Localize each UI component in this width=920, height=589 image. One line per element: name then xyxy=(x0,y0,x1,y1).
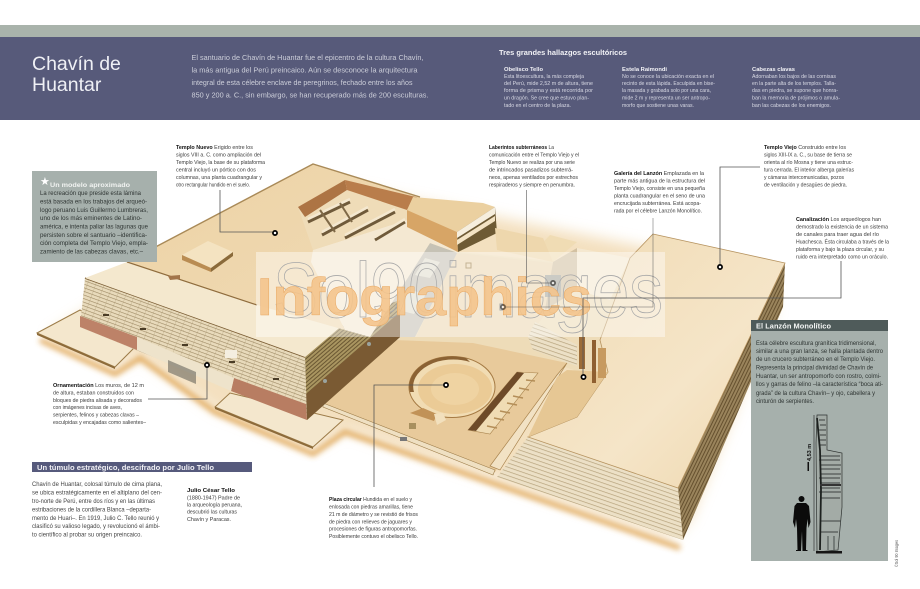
callout: Templo Nuevo: Templo Viejo, la base de su plataforma xyxy=(176,160,265,166)
Lanzón paragraph: grada” de la cultura Chavín– y ojo, cabellera y xyxy=(756,390,876,397)
callout: Templo Nuevo: Templo Nuevo Erigido entre los xyxy=(176,145,253,151)
finding: Estela Raimondi xyxy=(622,67,715,109)
Lanzón paragraph xyxy=(756,340,883,405)
ground wash xyxy=(40,180,775,548)
panel: Un modelo aproximado: ción completa del Templo Viejo, empla- xyxy=(40,241,148,247)
callout: Plaza circular: Plaza circular Hundida en el suelo y xyxy=(329,497,412,503)
finding: Estela Raimondi: No se conoce la ubicación exacta en el xyxy=(622,74,714,80)
callout: Plaza circular: enlosada con piedras amarillas, tiene xyxy=(329,504,413,510)
callout: Canalización: plataforma y bajo la plaza circular, y su xyxy=(796,247,884,253)
watermark: Sol90images: Sol90images xyxy=(273,246,663,334)
panel: Un modelo aproximado: américa, e intenta paliar las lagunas que xyxy=(40,224,149,230)
callout: Canalización: ruido era interpretado como un oráculo. xyxy=(796,254,888,260)
callout: Templo Nuevo: siglos VIII a. C. como ampliación del xyxy=(176,152,261,158)
strip between temples xyxy=(495,228,553,262)
callout: Plaza circular: Posiblemente contuvo el obelisco Tello. xyxy=(329,534,418,540)
callout: Ornamentación: esculpidas y encajadas como salientes– xyxy=(53,420,146,426)
drawing: Lanzón monolith xyxy=(816,415,842,554)
túmulo paragraph: clasificó su valioso legado, y revolucionó el ámbi- xyxy=(32,523,160,530)
bio: Julio César Tello: la arqueología peruana, xyxy=(187,502,242,508)
icon: human silhouette for scale xyxy=(793,496,810,551)
bio: Julio César Tello: (1880-1947) Padre de xyxy=(187,496,240,502)
bio: Julio César Tello xyxy=(187,488,242,523)
túmulo paragraph: Chavín de Huantar, colosal túmulo de cima plana, xyxy=(32,481,162,488)
front lower slab xyxy=(215,393,343,449)
Lanzón paragraph: similar a una gran lanza, se halla plantada dentro xyxy=(756,348,883,355)
túmulo paragraph: estribaciones de la cordillera Blanca –departa- xyxy=(32,506,151,514)
scale line and height label xyxy=(807,415,814,551)
callout: Galería del Lanzón: encrucijada subterránea. Está acopa- xyxy=(614,201,701,207)
callout: Templo Viejo: de ventilación y desagües de piedra. xyxy=(764,182,847,188)
finding: Cabezas clavas: en la parte alta de los templos. Talla- xyxy=(752,81,836,87)
Templo Nuevo front wall xyxy=(80,278,307,420)
callout: Ornamentación: de altura, estaban construidos con xyxy=(53,390,134,396)
intro paragraph: integral de esta célebre enclave de peregrinos, fechado entre los años xyxy=(192,78,413,87)
callout: Laberintos subterráneos: Laberintos subterráneos La xyxy=(489,145,554,151)
callout: Galería del Lanzón: Galería del Lanzón Emplazada en la xyxy=(614,171,704,177)
callout: Plaza circular: de piedra con relieves de jaguares y xyxy=(329,520,412,526)
callout: Galería del Lanzón: Templo Viejo, consiste en una pequeña xyxy=(614,186,705,192)
callout: Templo Viejo: siglos XIII-IX a. C., su base de tierra se xyxy=(764,152,852,158)
tall stone block xyxy=(407,197,497,252)
central corridors xyxy=(370,234,653,380)
left lower slab xyxy=(37,310,137,369)
callout: Templo Viejo: Templo Viejo Construido entre los xyxy=(764,145,846,151)
bio: Julio César Tello: Julio César Tello xyxy=(187,488,236,494)
callout: Laberintos subterráneos xyxy=(489,145,579,285)
intro paragraph xyxy=(192,53,428,100)
Lanzón paragraph: Representa la principal divinidad de Chavín de xyxy=(756,364,873,372)
platform top of Templo Nuevo xyxy=(127,164,458,337)
callout: Galería del Lanzón: rada por el célebre Lanzón Monolítico. xyxy=(614,208,702,214)
callout: Templo Nuevo: columnas, una planta cuadrangular y xyxy=(176,175,262,181)
callout: Ornamentación xyxy=(53,363,209,426)
callout: Laberintos subterráneos: respiraderos y siempre en penumbra. xyxy=(489,182,575,188)
Lanzón paragraph: de un crucero subterráneo en el Templo Viejo. xyxy=(756,356,875,363)
callout: Ornamentación: serpientes, felinos y cabezas clavas – xyxy=(53,412,139,418)
Lanzón paragraph: Huantar, un ser antropomorfo con rostro, colmi- xyxy=(756,373,881,380)
túmulo paragraph: to científico al probar su origen preincaico. xyxy=(32,532,142,538)
callout: Ornamentación: con imágenes incisas de aves, xyxy=(53,405,122,411)
callout: Templo Nuevo: otro rectangular hundido en el suelo. xyxy=(176,182,250,188)
circular plaza floor xyxy=(323,340,567,475)
callout: Laberintos subterráneos: de intrincados pasadizos subterrá- xyxy=(489,168,573,174)
finding: Cabezas clavas: ban las cabezas de los enemigos. xyxy=(752,103,831,109)
callout: Templo Viejo xyxy=(718,145,854,269)
bio: Julio César Tello: Chavín y Paracas. xyxy=(187,517,231,523)
panel: Un modelo aproximado xyxy=(32,171,157,262)
finding: Obelisco Tello: Esta litoescultura, la más compleja xyxy=(504,74,584,80)
callout: Laberintos subterráneos: neos, apenas ventilados por estrechos xyxy=(489,175,578,181)
callout: Canalización: de canales para traer agua del río xyxy=(796,232,879,238)
finding: Cabezas clavas: das en piedra, se supone que honra- xyxy=(752,88,838,94)
callout: Plaza circular xyxy=(329,383,448,540)
sunken circular plaza xyxy=(409,356,495,425)
intro paragraph: El santuario de Chavín de Huantar fue el epicentro de la cultura Chavín, xyxy=(192,53,424,62)
finding: Cabezas clavas: ban la memoria de prójimos o amula- xyxy=(752,95,840,101)
finding: Obelisco Tello: un dragón. Se cree que estuvo plan- xyxy=(504,95,589,101)
Lanzón paragraph: Esta célebre escultura granítica tridimensional, xyxy=(756,340,876,347)
callout: Laberintos subterráneos: comunicación entre el Templo Viejo y el xyxy=(489,152,579,158)
red base bands xyxy=(80,316,137,350)
finding: Estela Raimondi: la masada y grabada solo por una cara, xyxy=(622,88,711,94)
title: Huantar xyxy=(32,74,102,96)
túmulo paragraph: se ubica estratégicamente en el altiplano del cen- xyxy=(32,490,162,496)
callout: Galería del Lanzón: parte más antigua de la estructura del xyxy=(614,178,705,184)
exposed gallery xyxy=(528,370,608,437)
watermark: Infographics: Infographics xyxy=(257,268,592,327)
panel: Un túmulo estratégico xyxy=(32,462,252,538)
icon: star: ★ xyxy=(40,176,50,188)
finding: Estela Raimondi: morfo que sostiene unas varas. xyxy=(622,103,694,109)
callout: Canalización: Canalización Los arqueólogos han xyxy=(796,217,881,223)
panel: Un modelo aproximado: Un modelo aproximado xyxy=(50,182,130,189)
sunken rectangular court xyxy=(298,180,420,250)
callout: Templo Viejo: orienta al río Mosna y tiene una estruc- xyxy=(764,160,853,166)
top surface xyxy=(528,234,785,488)
callout: Templo Viejo: y cámaras intercomunicadas, pozos xyxy=(764,175,844,181)
terrace top xyxy=(85,262,352,357)
stepped channel xyxy=(468,372,538,434)
panel: Un modelo aproximado: logo peruano Luis Guillermo Lumbreras, xyxy=(40,208,148,214)
callout: Templo Nuevo xyxy=(176,145,277,235)
findings heading: Tres grandes hallazgos escultóricos xyxy=(499,48,627,57)
túmulo paragraph: tro-norte de Perú, entre dos ríos y en las últimas xyxy=(32,498,155,505)
small stone base xyxy=(182,241,233,272)
right side wall xyxy=(678,263,785,540)
finding: Obelisco Tello xyxy=(504,67,593,109)
light floor beneath pit xyxy=(311,216,458,337)
panel: Un modelo aproximado: persisten sobre el santuario –identifica- xyxy=(40,233,147,239)
scale line and height label: 4,53 m xyxy=(807,444,813,461)
panel: Un modelo aproximado: La recreación que preside esta lámina xyxy=(40,191,142,197)
finding: Obelisco Tello: del Perú, mide 2,52 m de altura, tiene xyxy=(504,81,593,87)
callout: Plaza circular: 21 m de diámetro y se revistió de frisos xyxy=(329,512,418,518)
panel: El Lanzón Monolítico xyxy=(751,320,888,561)
intro paragraph: 850 y 200 a. C., sin embargo, se han recuperado más de 200 esculturas. xyxy=(192,90,428,100)
intro paragraph: la más antigua del Perú preincaico. Aún se desconoce la arquitectura xyxy=(192,66,418,74)
panel: El Lanzón Monolítico: El Lanzón Monolítico xyxy=(756,322,831,330)
callout: Templo Nuevo: central incluyó un pórtico con dos xyxy=(176,168,256,174)
callout: Canalización xyxy=(581,217,889,379)
finding: Obelisco Tello: Obelisco Tello xyxy=(504,67,544,73)
front wall xyxy=(497,437,683,540)
callout: Canalización: Huachesca. Ésta circulaba a través de la xyxy=(796,238,889,246)
finding: Cabezas clavas: Adornaban los bajos de las cornisas xyxy=(752,74,836,80)
illustration: Chavín de Huantar temple complex xyxy=(37,164,785,548)
finding: Estela Raimondi: mide 2 m y representa un ser antropo- xyxy=(622,95,710,101)
callout: Laberintos subterráneos: Templo Nuevo se realiza por una serie xyxy=(489,160,575,166)
finding: Estela Raimondi: recinto de esta lápida. Esculpida en bise- xyxy=(622,81,715,87)
túmulo paragraph xyxy=(32,481,162,538)
finding: Cabezas clavas: Cabezas clavas xyxy=(752,67,795,73)
bio: Julio César Tello: descubrió las culturas xyxy=(187,510,237,516)
finding: Obelisco Tello: tado en el centro de la plaza. xyxy=(504,103,571,109)
finding: Estela Raimondi: Estela Raimondi xyxy=(622,67,668,73)
callout: Galería del Lanzón xyxy=(501,171,705,309)
Templo Viejo xyxy=(497,234,785,540)
Lanzón paragraph: cinturón de serpientes. xyxy=(756,398,814,405)
túmulo paragraph: mento de Huari–. En 1919, Julio C. Tello reunió y xyxy=(32,515,160,522)
panel: Un modelo aproximado: está basada en los trabajos del arqueó- xyxy=(40,200,147,206)
panel: Un modelo aproximado: uno de los más eminentes de Latino- xyxy=(40,216,142,222)
header band xyxy=(0,25,920,120)
Lanzón paragraph: llos y garras de felino –la característica “boca ati- xyxy=(756,381,883,388)
callout: Templo Viejo: tura cerrada. El interior alberga galerías xyxy=(764,168,854,174)
panel: Un túmulo estratégico: Un túmulo estratégico, descifrado por Julio Tello xyxy=(37,463,214,472)
callout: Galería del Lanzón: planta cuadrangular en el seno de una xyxy=(614,194,705,200)
title: Chavín de xyxy=(32,53,121,75)
finding: Obelisco Tello: forma de prisma y está recorrida por xyxy=(504,88,593,94)
right face of Templo Nuevo xyxy=(305,300,400,420)
callout: Ornamentación: bloques de piedra alisada y decorados xyxy=(53,398,142,404)
finding: Cabezas clavas xyxy=(752,67,840,109)
callout: Canalización: demostrado la existencia de un sistema xyxy=(796,224,888,230)
callout: Plaza circular: procesiones de figuras antropomorfas. xyxy=(329,526,417,532)
translucent watermark panel xyxy=(256,252,665,337)
image credit: ©Sol 90 Images xyxy=(893,539,899,567)
panel: Un modelo aproximado: zamiento de las cabezas clavas, etc.– xyxy=(40,250,144,256)
callout: Ornamentación: Ornamentación Los muros, de 12 m xyxy=(53,383,145,389)
